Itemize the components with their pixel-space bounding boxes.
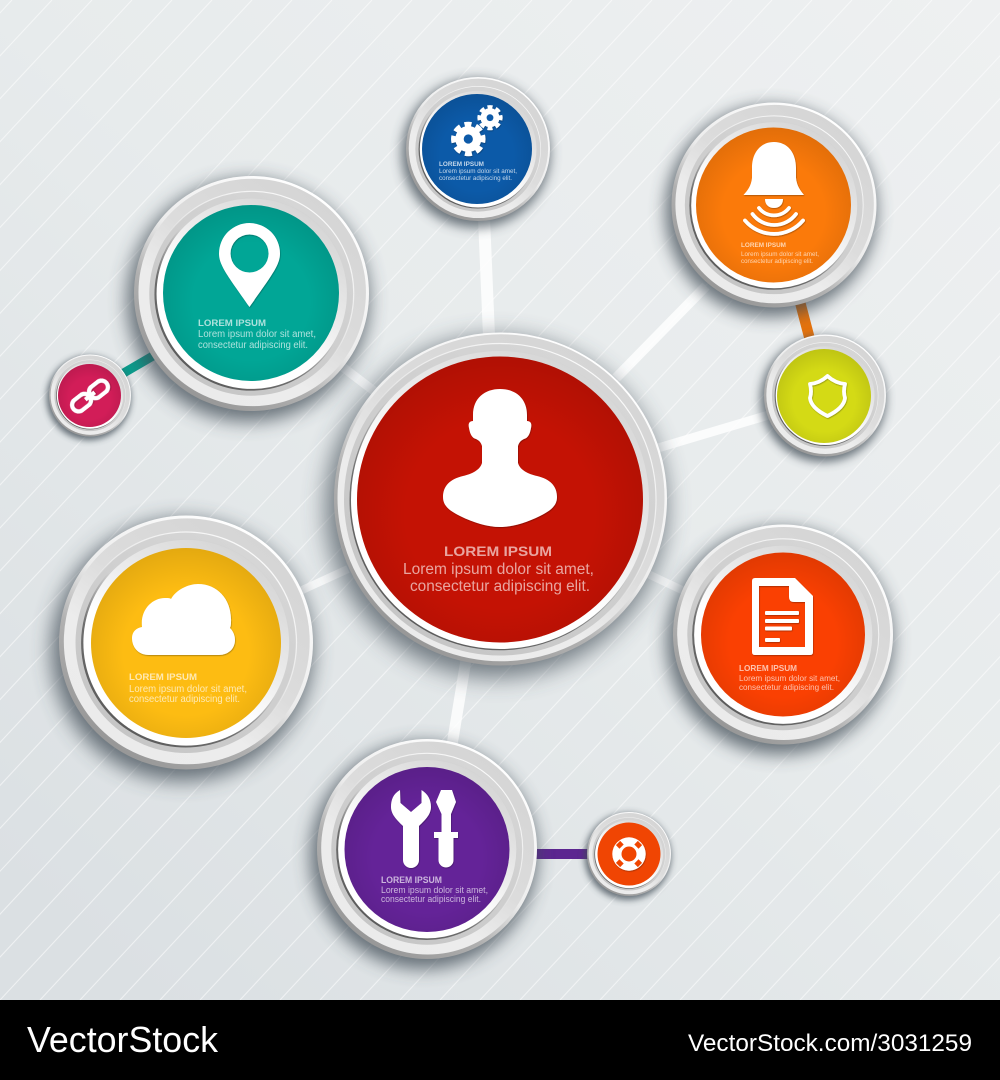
text: orange caption: LOREM IPSUM: [741, 242, 786, 249]
connector: teal to crimson: [122, 353, 158, 374]
text: teal caption: consectetur adipiscing elit.: [198, 340, 308, 351]
node: lime shield: [760, 334, 886, 462]
icon: cloud: [132, 584, 235, 655]
watermark: url: VectorStock.com/3031259: [688, 1030, 972, 1057]
text: purple caption: LOREM IPSUM: [381, 875, 442, 885]
text: blue caption: [439, 161, 517, 182]
node: teal location: [127, 176, 369, 422]
watermark: brand: VectorStock: [27, 1019, 219, 1060]
text: teal caption: Lorem ipsum dolor sit amet,: [198, 329, 316, 340]
text: document caption: LOREM IPSUM: [739, 664, 797, 673]
connector: center to document: [648, 574, 684, 591]
connector: center to blue: [484, 218, 489, 336]
node: central red person: [326, 332, 667, 677]
connector: orange to lime: [800, 302, 810, 340]
text: central caption: [403, 543, 594, 595]
node: orange bell: [665, 102, 876, 317]
connector: center to purple: [452, 660, 466, 745]
text: purple caption: Lorem ipsum dolor sit amet,: [381, 885, 488, 895]
connector: center to yellow: [300, 569, 348, 591]
node: orange lifebuoy: [584, 812, 671, 900]
text: blue caption: Lorem ipsum dolor sit amet,: [439, 168, 517, 175]
icon: person silhouette: [443, 389, 557, 527]
node: purple tools: [310, 739, 537, 969]
icon: shield: [810, 376, 845, 416]
text: orange caption: [741, 242, 819, 265]
text: blue caption: LOREM IPSUM: [439, 161, 484, 168]
text: central caption: LOREM IPSUM: [444, 543, 552, 559]
icon: map pin: [219, 223, 280, 307]
node: blue gears: [402, 77, 550, 227]
text: yellow caption: [129, 672, 247, 705]
connector: center to teal: [340, 365, 374, 391]
connector: center to orange: [616, 286, 706, 378]
icon: bell with waves: [744, 142, 804, 234]
node: red-orange document: [666, 524, 893, 754]
text: blue caption: consectetur adipiscing elit.: [439, 175, 512, 182]
icon: gears: [454, 107, 500, 154]
text: central caption: Lorem ipsum dolor sit amet,: [403, 561, 594, 578]
text: purple caption: consectetur adipiscing elit.: [381, 894, 481, 904]
text: yellow caption: Lorem ipsum dolor sit amet,: [129, 684, 247, 695]
text: orange caption: consectetur adipiscing elit.: [741, 258, 813, 265]
icon: chain link: [69, 378, 111, 414]
text: document caption: consectetur adipiscing elit.: [739, 682, 834, 692]
icon: document: [752, 578, 813, 655]
text: central caption: consectetur adipiscing elit.: [410, 578, 590, 595]
text: document caption: Lorem ipsum dolor sit amet,: [739, 673, 840, 683]
text: orange caption: Lorem ipsum dolor sit amet,: [741, 251, 819, 258]
node: crimson link: [47, 354, 131, 440]
connector: purple to lifebuoy: [532, 849, 592, 859]
connector: center to lime: [658, 414, 772, 448]
text: teal caption: LOREM IPSUM: [198, 318, 266, 329]
central plate: [326, 332, 667, 677]
text: document caption: [739, 664, 840, 692]
node: yellow cloud: [51, 516, 313, 781]
icon: wrench and screwdriver: [391, 790, 458, 868]
icon: lifebuoy: [607, 832, 651, 876]
text: yellow caption: consectetur adipiscing elit.: [129, 694, 240, 705]
watermark bar: [0, 1000, 1000, 1080]
text: yellow caption: LOREM IPSUM: [129, 672, 197, 683]
text: teal caption: [198, 318, 316, 351]
text: purple caption: [381, 875, 488, 904]
